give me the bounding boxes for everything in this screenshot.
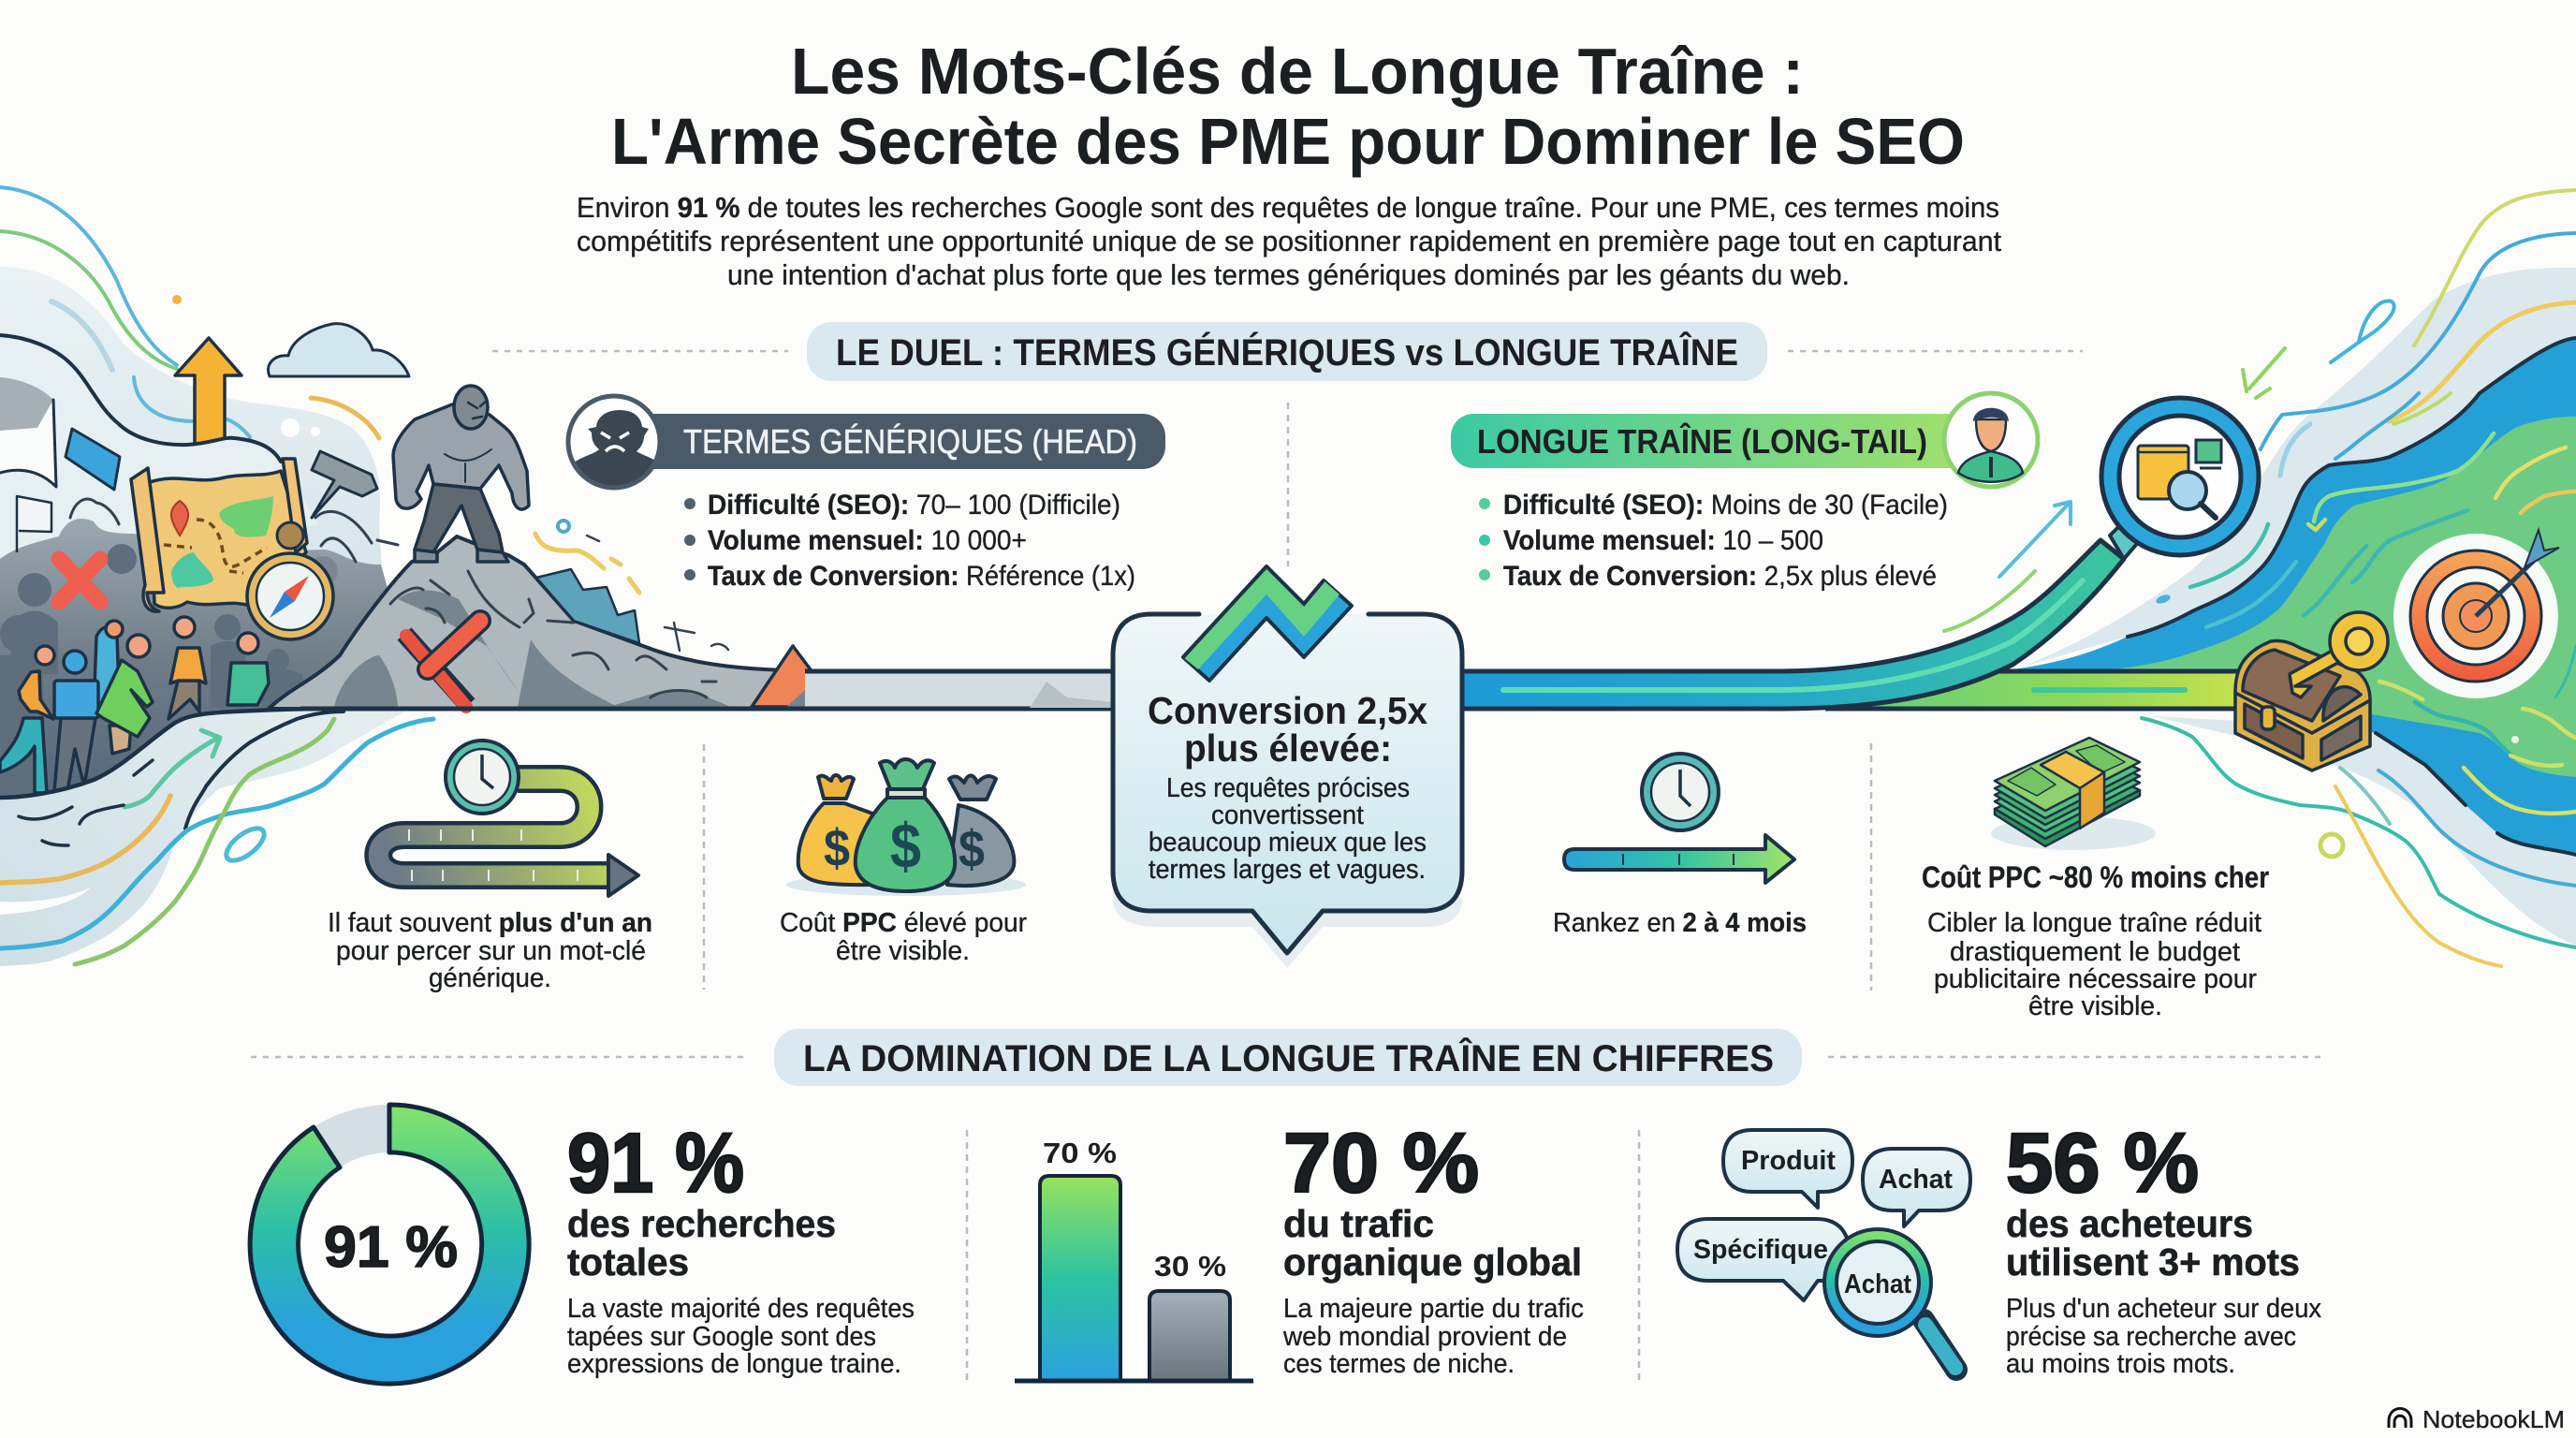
blue road and magnifier handle (1462, 540, 2124, 709)
bubble: achat: Achat (1879, 1165, 1953, 1195)
target with arrow (2393, 530, 2559, 698)
grey hammer sign (312, 451, 377, 518)
small orange peak (752, 646, 842, 707)
big red cross (404, 621, 480, 707)
stat text: 56 % (2006, 1117, 2199, 1211)
bullet list: Difficulté (SEO): Moins de 30 (Facile) (1503, 490, 1948, 521)
bullet list (684, 490, 1135, 592)
intro paragraph: une intention d'achat plus forte que les termes génériques dominés par les géants du web. (727, 258, 1850, 291)
flowing lines top left (0, 187, 379, 438)
icon: money bags (786, 759, 1026, 896)
mountain shading (334, 591, 730, 707)
stat text: web mondial provient de (1282, 1322, 1567, 1352)
donut chart: 91 % (324, 1215, 458, 1280)
snow bumps and outlines (70, 499, 398, 562)
text: coût PPC moins cher: drastiquement le budget (1950, 937, 2240, 967)
header pill head (613, 414, 1165, 469)
callout shadow (1113, 655, 1462, 968)
stat text: des recherches (567, 1202, 836, 1245)
white dot (2511, 736, 2519, 743)
stat text: utilisent 3+ mots (2006, 1240, 2300, 1284)
section heading: le duel (807, 322, 1767, 381)
snow ridge (0, 335, 318, 599)
bullet list: Difficulté (SEO): 70– 100 (Difficile) (708, 490, 1120, 521)
grey bag (947, 775, 1014, 886)
magnifier: Achat (1844, 1269, 1911, 1299)
compass (247, 522, 333, 639)
top right flowing lines (1944, 190, 2576, 966)
callout heading: Conversion 2,5x (1148, 689, 1427, 732)
stat text: Plus d'un acheteur sur deux (2006, 1294, 2321, 1324)
icon: clock and short arrow (1564, 754, 1794, 883)
text: plus d'un an (328, 908, 652, 993)
stat text: des acheteurs (2006, 1202, 2253, 1245)
bar chart: 30 % (1154, 1250, 1226, 1283)
bullet list: Taux de Conversion: Référence (1x) (708, 561, 1135, 592)
stat text: organique global (1283, 1240, 1582, 1284)
pale swirl bottom (2153, 716, 2576, 946)
grey peak (0, 377, 53, 431)
grey road into callout (300, 671, 1113, 709)
intro paragraph: compétitifs représentent une opportunité unique de se positionner rapidement en première page tout en capturant (577, 225, 2001, 257)
river bottom edge (2376, 733, 2576, 855)
callout body (1149, 773, 1427, 885)
dot (172, 295, 182, 304)
callout body: Les requêtes prócises (1166, 773, 1410, 803)
intro paragraph (577, 191, 2001, 291)
bubble: produit (1723, 1130, 1852, 1208)
bullet list: Volume mensuel: 10 000+ (708, 525, 1027, 556)
logo: NotebookLM: NotebookLM (2422, 1405, 2565, 1433)
panel: longue traîne (1451, 393, 2038, 592)
panel: termes génériques (562, 396, 1165, 592)
bullet list: Taux de Conversion: 2,5x plus élevé (1503, 561, 1937, 592)
title (611, 35, 1965, 178)
mountain (269, 536, 824, 709)
blue flag (66, 429, 120, 490)
icon: money stack (1991, 738, 2156, 850)
pale wave backdrop (0, 267, 384, 655)
donut chart (250, 1105, 529, 1384)
stat text: La majeure partie du trafic (1283, 1294, 1584, 1324)
stat text: du trafic (1283, 1202, 1434, 1245)
bubble: spécifique (1677, 1219, 1849, 1300)
text: coût PPC moins cher: être visible. (2028, 991, 2162, 1021)
stat panel: 56 % (1677, 1117, 2321, 1379)
yellow up arrow (175, 338, 242, 444)
doodles (587, 536, 728, 651)
icon: zigzag growth chart (1183, 566, 1352, 681)
bullet list: Volume mensuel: 10 – 500 (1503, 525, 1823, 556)
green inner river (2102, 417, 2576, 777)
stat text: totales (567, 1240, 689, 1284)
stat text: 70 % (1283, 1117, 1479, 1211)
right illustration: long tail river and rewards (1462, 190, 2576, 966)
long tail green band (1825, 673, 2239, 708)
callout heading (1148, 689, 1427, 770)
icon: money bags: $ (824, 818, 850, 877)
text: coût PPC moins cher: publicitaire nécessaire pour (1934, 964, 2257, 994)
stat text: au moins trois mots. (2006, 1349, 2235, 1379)
stat text: ces termes de niche. (1283, 1349, 1515, 1379)
text: coût PPC moins cher: Coût PPC ~80 % moins cher (1922, 860, 2269, 894)
text: coût PPC élevé: Coût PPC élevé pour (780, 908, 1027, 938)
lower river lines (0, 709, 433, 964)
text: coût PPC élevé: être visible. (836, 936, 970, 966)
bubble: produit: Produit (1741, 1146, 1836, 1176)
bubble: spécifique: Spécifique (1693, 1235, 1828, 1265)
bar chart: 70 % (1043, 1137, 1117, 1169)
icon: winding road with clock (378, 741, 638, 896)
intro paragraph: Environ 91 % de toutes les recherches Google sont des requêtes de longue traîne. Pour une PME, ces termes moins (577, 191, 1999, 224)
river top edge (2128, 338, 2576, 637)
callout: conversion 2,5x (1113, 566, 1462, 968)
ring (2320, 834, 2343, 857)
white flag (0, 400, 56, 487)
text: plus d'un an: générique. (429, 963, 551, 993)
treasure chest with key (2235, 612, 2388, 770)
snow dots (281, 418, 320, 437)
small flag on pole (17, 496, 51, 552)
bullet list (1479, 490, 1948, 592)
small ring (558, 521, 569, 532)
header pill head: TERMES GÉNÉRIQUES (HEAD) (683, 422, 1137, 461)
ogre: generic giant (393, 386, 529, 562)
icon: speech bubbles and magnifier (1677, 1130, 1970, 1370)
text: coût PPC élevé (780, 908, 1027, 966)
title: Les Mots-Clés de Longue Traîne : (791, 35, 1804, 108)
bar chart (1015, 1137, 1253, 1381)
pale swirl top (2023, 268, 2576, 667)
icon: ogre avatar (565, 393, 657, 491)
callout heading: plus élevée: (1184, 726, 1392, 770)
header pill long tail (1451, 414, 1988, 468)
stat text: La vaste majorité des requêtes (567, 1294, 915, 1324)
callout body: termes larges et vagues. (1149, 855, 1426, 885)
title: L'Arme Secrète des PME pour Dominer le SEO (611, 105, 1965, 178)
crowd silhouettes (0, 519, 393, 814)
stat text (1282, 1117, 1584, 1379)
lower river left (0, 709, 405, 966)
stat text: 91 % (567, 1117, 744, 1211)
magnifier (1824, 1229, 1956, 1370)
yellow bag (798, 775, 875, 885)
white streak (0, 888, 91, 915)
magnifier with folder (2101, 398, 2259, 559)
blue river (1998, 338, 2576, 855)
callout body: convertissent (1211, 800, 1364, 830)
stat text (567, 1117, 915, 1379)
blue dash (2155, 594, 2172, 605)
icon: money bags: $ (959, 819, 985, 878)
stat text: tapées sur Google sont des (567, 1322, 876, 1352)
text: rankez: Rankez en 2 à 4 mois (1553, 908, 1807, 938)
callout body: beaucoup mieux que les (1149, 828, 1427, 858)
bubble: achat (1863, 1149, 1970, 1226)
text: plus d'un an: pour percer sur un mot-clé (336, 936, 646, 966)
text: coût PPC moins cher: Cibler la longue traîne réduit (1927, 908, 2261, 938)
header pill long tail: LONGUE TRAÎNE (LONG-TAIL) (1477, 421, 1927, 461)
text: plus d'un an: Il faut souvent plus d'un an (328, 908, 652, 938)
blue crystal rocks (536, 569, 639, 643)
decorative yellow squiggle (535, 534, 639, 593)
people (0, 617, 269, 793)
left illustration: crowded generic terms landscape (0, 187, 842, 966)
stat text: expressions de longue traine. (567, 1349, 901, 1379)
red cross (59, 559, 100, 602)
treasure map (131, 459, 307, 611)
green bag (856, 759, 955, 891)
icon: professional avatar (1944, 393, 2038, 487)
stat panel: 91 % (250, 1105, 915, 1384)
cloud (268, 324, 409, 376)
mountain cracks (390, 571, 716, 697)
section heading: la domination: LA DOMINATION DE LA LONGUE TRAÎNE EN CHIFFRES (803, 1036, 1774, 1079)
flow lines inside river (2190, 433, 2576, 814)
stat panel: 70 % (1015, 1117, 1584, 1381)
text: coût PPC moins cher (1922, 860, 2269, 1021)
stat text: précise sa recherche avec (2006, 1322, 2296, 1352)
section heading: le duel: LE DUEL : TERMES GÉNÉRIQUES vs LONGUE TRAÎNE (836, 330, 1738, 374)
icon: money bags: $ (890, 811, 921, 882)
stat text (2006, 1117, 2321, 1379)
